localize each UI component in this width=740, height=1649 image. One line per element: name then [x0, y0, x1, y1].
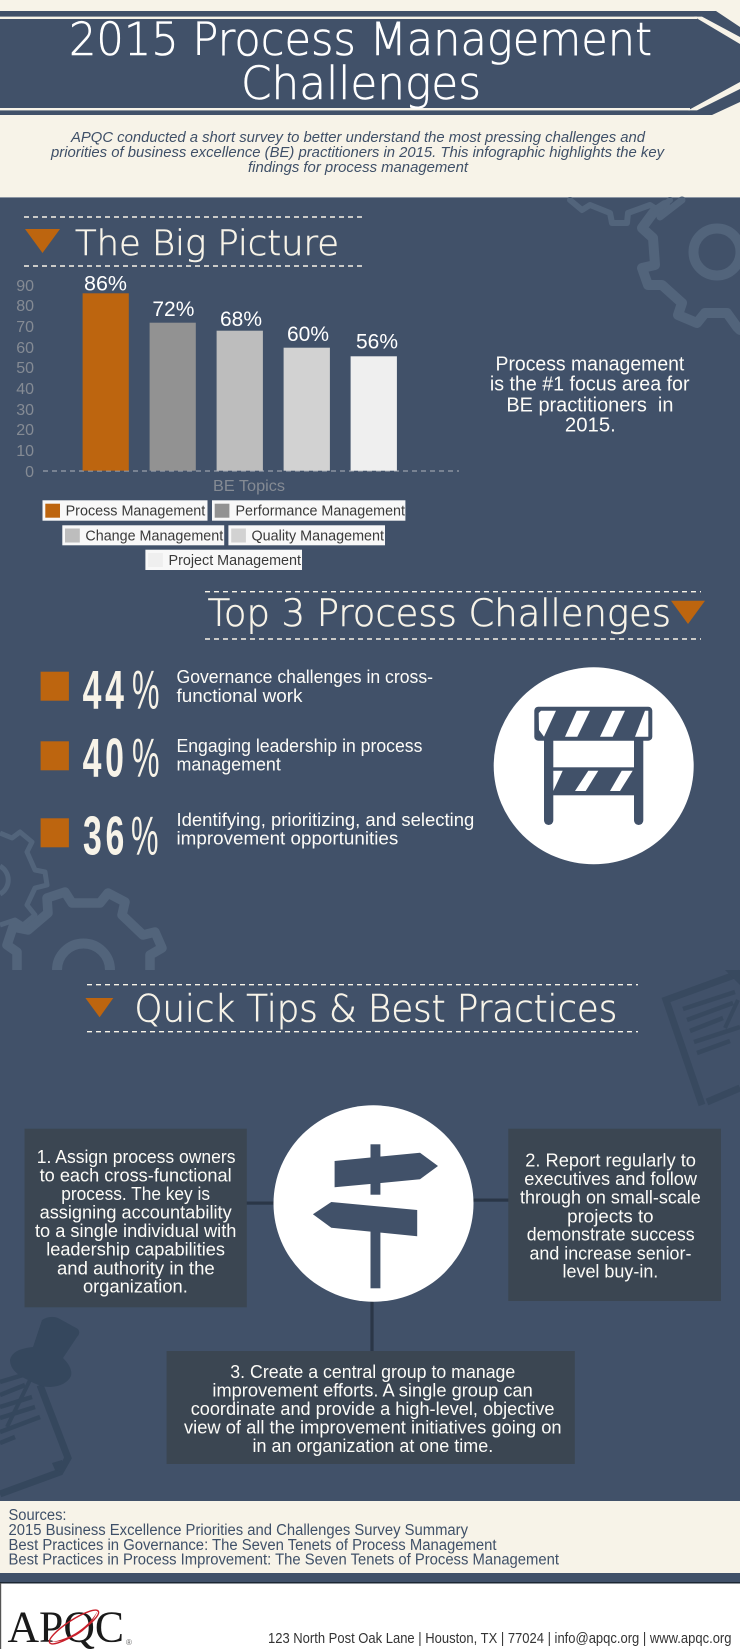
tip 1 box: process. The key is — [61, 1183, 210, 1204]
stat: 40 percent: 40 — [83, 727, 128, 789]
stat: 36 percent: improvement opportunities — [176, 828, 398, 849]
watermark: gears lower left — [0, 832, 162, 970]
panel: main blue background — [0, 197, 740, 1501]
stat: 36 percent: Identifying, prioritizing, and selecting — [176, 809, 474, 830]
chart legend: Change Management — [85, 528, 223, 544]
tip 1 box: to a single individual with — [35, 1220, 236, 1241]
icon: signpost — [274, 1105, 474, 1302]
intro text: priorities of business excellence (BE) practitioners in 2015. This infographic highlights the key — [50, 144, 665, 161]
value labels: 68% — [220, 308, 262, 331]
tip 1 box: assigning accountability — [40, 1201, 232, 1222]
stat: 40 percent: % — [132, 728, 160, 789]
y axis labels: 30 — [16, 402, 34, 419]
value labels: 56% — [356, 330, 398, 353]
stat: 40 percent — [41, 727, 422, 789]
stat: 40 percent: management — [176, 753, 281, 774]
y axis labels: 80 — [16, 298, 34, 315]
chart legend: Process Management — [66, 504, 205, 520]
callout: number one focus area: is the #1 focus area for — [490, 374, 690, 396]
intro text: APQC conducted a short survey to better understand the most pressing challenges and — [70, 129, 646, 146]
stat: 44 percent — [41, 659, 433, 720]
footer band — [0, 1573, 740, 1649]
tip 2 box: projects to — [567, 1205, 654, 1226]
stat: 44 percent: 44 — [83, 659, 128, 720]
heading: Quick Tips and Best Practices: Quick Tips & Best Practices — [134, 988, 617, 1031]
bar chart — [16, 273, 459, 495]
tip 2 box: demonstrate success — [527, 1224, 695, 1245]
stat: 36 percent — [41, 805, 474, 867]
axis title: BE Topics — [213, 478, 285, 495]
tip 3 box: coordinate and provide a high-level, objective — [191, 1398, 554, 1419]
tip 1 box: 1. Assign process owners — [37, 1146, 235, 1167]
connectors — [244, 1198, 509, 1352]
title: 2015 Process Management — [69, 13, 652, 66]
y axis labels: 10 — [16, 443, 34, 460]
sources panel: 2015 Business Excellence Priorities and Challenges Survey Summary — [8, 1522, 468, 1539]
icon: triangle — [25, 229, 60, 253]
watermark: notepad right — [666, 970, 740, 1105]
tip 3 box: in an organization at one time. — [252, 1435, 493, 1456]
tip 2 box — [508, 1129, 721, 1301]
tip 1 box — [24, 1129, 247, 1307]
icon: triangle — [85, 998, 113, 1017]
stat: 44 percent: Governance challenges in cross- — [176, 666, 433, 687]
tip 2 box: and increase senior- — [530, 1242, 691, 1263]
chart legend — [42, 500, 405, 570]
sources panel: Best Practices in Governance: The Seven Tenets of Process Management — [8, 1537, 497, 1554]
heading: Top 3 Process Challenges: Top 3 Process Challenges — [208, 592, 671, 635]
y axis labels — [16, 278, 34, 481]
tip 2 box: through on small-scale — [520, 1186, 701, 1207]
value labels: 60% — [287, 323, 329, 346]
tip 3 box: view of all the improvement initiatives going on — [184, 1417, 562, 1438]
value labels: 86% — [84, 273, 127, 296]
chart legend: Quality Management — [252, 528, 384, 544]
tip 1 box: and authority in the — [57, 1257, 215, 1278]
tip 1 box: to each cross-functional — [40, 1164, 232, 1185]
y axis labels: 70 — [16, 319, 34, 336]
title: Challenges — [241, 57, 481, 110]
logo: APQC: ® — [126, 1638, 132, 1647]
y axis labels: 0 — [25, 464, 34, 481]
intro text — [50, 129, 665, 176]
stat: 44 percent: functional work — [176, 685, 303, 706]
chart legend: Project Management — [168, 553, 301, 569]
sources panel — [0, 1501, 740, 1573]
tip 3 box — [167, 1351, 575, 1464]
stat: 36 percent: 36 — [83, 805, 128, 867]
tip 2 box: 2. Report regularly to — [525, 1150, 696, 1171]
y axis labels: 20 — [16, 422, 34, 439]
callout: number one focus area — [490, 354, 690, 437]
y axis labels: 90 — [16, 278, 34, 295]
stat: 44 percent: % — [132, 659, 160, 720]
tip 1 box: organization. — [83, 1275, 188, 1296]
title — [69, 13, 652, 110]
tip 1 box: leadership capabilities — [46, 1239, 225, 1260]
callout: number one focus area: BE practitioners in — [506, 394, 673, 416]
stat: 36 percent: % — [131, 806, 158, 867]
tip 2 box: executives and follow — [524, 1168, 698, 1189]
sources panel: Best Practices in Process Improvement: The Seven Tenets of Process Management — [8, 1552, 560, 1569]
value labels — [84, 273, 398, 353]
icon: triangle — [671, 601, 705, 624]
tip 3 box: 3. Create a central group to manage — [230, 1361, 515, 1382]
value labels: 72% — [152, 298, 194, 321]
stat: 40 percent: Engaging leadership in process — [176, 735, 422, 756]
y axis labels: 60 — [16, 340, 34, 357]
header banner — [0, 11, 740, 115]
watermark: pushpin and notepad left — [0, 1317, 79, 1494]
callout: number one focus area: 2015. — [565, 415, 616, 437]
sources panel: Sources: — [8, 1507, 66, 1524]
callout: number one focus area: Process management — [496, 354, 685, 376]
icon: road barricade — [494, 667, 694, 864]
chart legend: Performance Management — [236, 504, 405, 520]
intro text: findings for process management — [248, 159, 469, 176]
heading: The Big Picture: The Big Picture — [75, 224, 339, 264]
y axis labels: 50 — [16, 360, 34, 377]
heading: The Big Picture — [24, 217, 363, 266]
y axis labels: 40 — [16, 381, 34, 398]
tip 3 box: improvement efforts. A single group can — [212, 1380, 533, 1401]
tip 2 box: level buy-in. — [562, 1261, 658, 1282]
watermark: gears top right — [570, 200, 740, 330]
